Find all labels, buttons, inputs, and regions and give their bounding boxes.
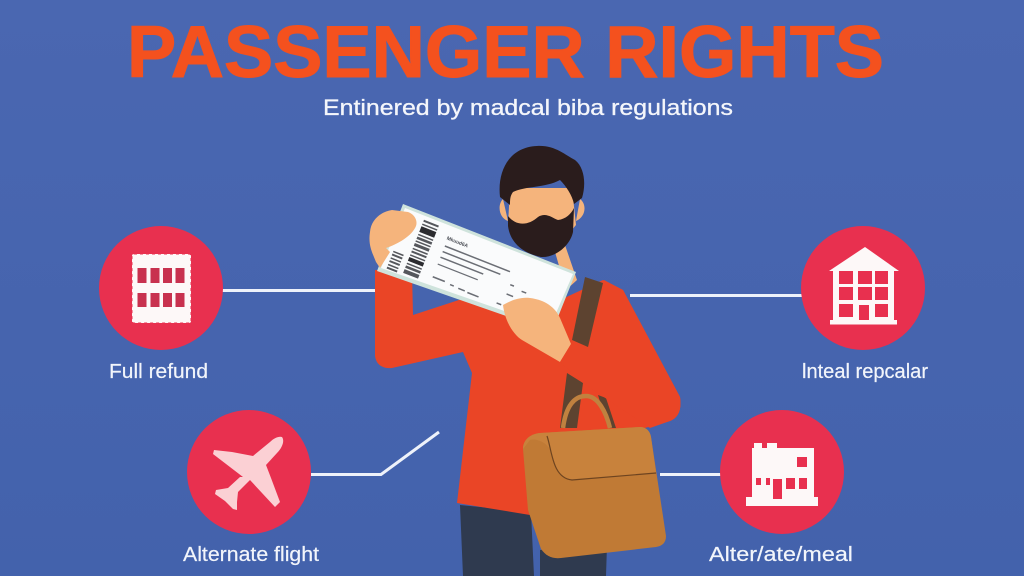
ears and neck bbox=[500, 199, 585, 290]
bag handle bbox=[563, 396, 610, 428]
title: PASSENGER RIGHTS bbox=[127, 12, 884, 93]
label: full refund: Full refund bbox=[109, 361, 208, 383]
label: meal: Alter/ate/meal bbox=[709, 544, 853, 566]
ticket text: Mkuud6A bbox=[446, 236, 469, 250]
right hand bbox=[503, 298, 571, 362]
icon: airplane bbox=[187, 410, 311, 534]
label: hotel: lnteal repcalar bbox=[802, 361, 928, 383]
sweater bbox=[375, 270, 681, 520]
barcode bbox=[387, 214, 439, 281]
left hand bbox=[369, 210, 417, 268]
panel: hotel bbox=[801, 226, 928, 383]
label: alternate flight: Alternate flight bbox=[183, 544, 319, 566]
figure: traveller holding ticket bbox=[369, 146, 681, 576]
panel: meal bbox=[709, 410, 853, 566]
panel: alternate flight bbox=[183, 410, 319, 566]
face bbox=[508, 188, 576, 250]
beard bbox=[508, 208, 574, 257]
icon: hotel building bbox=[801, 226, 925, 350]
hair bbox=[500, 146, 584, 205]
icon: meal building bbox=[720, 410, 844, 534]
icon: refund ticket sheet bbox=[99, 226, 223, 350]
bag bbox=[523, 427, 666, 558]
trousers bbox=[460, 505, 607, 576]
strap over sleeve bbox=[572, 277, 603, 347]
connector lines bbox=[222, 290, 803, 474]
panel: full refund bbox=[99, 226, 223, 383]
sleeve bbox=[560, 280, 681, 428]
lower strap bbox=[560, 373, 616, 428]
subtitle: Entinered by madcal biba regulations bbox=[323, 95, 733, 120]
ticket bbox=[377, 204, 576, 332]
